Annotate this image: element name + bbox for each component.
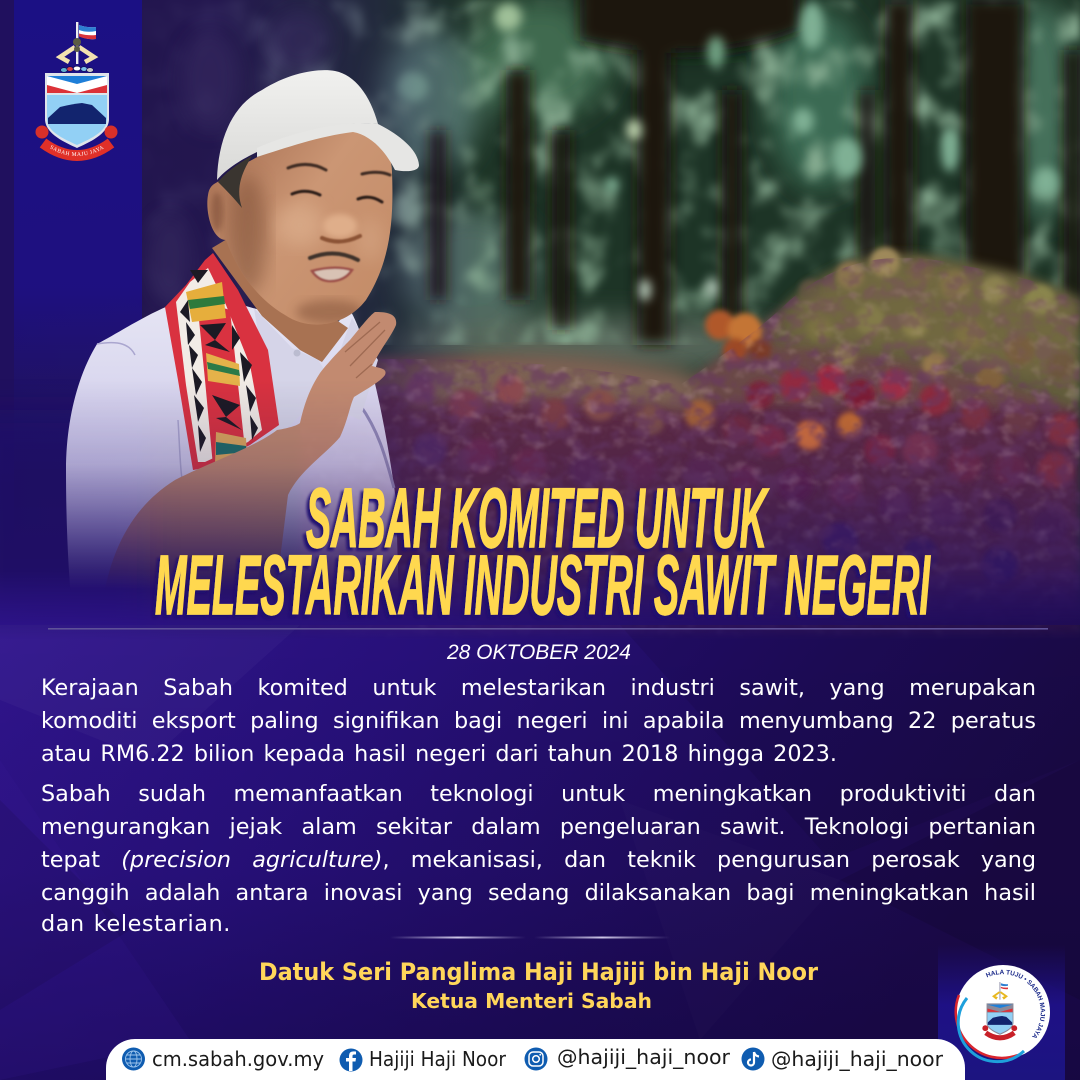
body text: tepat (precision agriculture), mekanisasi, dan teknik pengurusan perosak yang <box>41 847 1036 873</box>
right logo backing panel <box>938 945 1065 1080</box>
palm trunks <box>430 0 1080 345</box>
hands holding pole <box>60 47 94 62</box>
Sabah coat of arms <box>36 22 118 161</box>
light spots <box>398 2 1059 343</box>
red palm fruits <box>405 365 1078 583</box>
fruit pile base <box>300 254 1080 640</box>
facebook text: Hajiji Haji Noor <box>369 1047 507 1071</box>
foliage mottling <box>142 0 1080 345</box>
arm and hand <box>103 312 396 600</box>
background palm plantation photo <box>0 0 1080 640</box>
instagram text: @hajiji_haji_noor <box>557 1045 731 1069</box>
collar <box>254 308 378 412</box>
body text: Kerajaan Sabah komited untuk melestarikan industri sawit, yang merupakan <box>41 675 1036 701</box>
lower purple panel with facets <box>0 560 1080 1080</box>
face shading <box>211 175 384 324</box>
portrait of chief minister <box>66 70 419 582</box>
purple overlays on photo <box>0 0 1080 640</box>
body text: canggih adalah antara inovasi yang sedang dilaksanakan bagi meningkatkan hasil <box>41 880 1036 906</box>
website text: cm.sabah.gov.my <box>152 1047 324 1071</box>
signatory name: Datuk Seri Panglima Haji Hajiji bin Haji Noor <box>259 958 818 986</box>
shirt folds <box>97 343 394 500</box>
shirt <box>66 306 398 582</box>
left blue band <box>0 0 150 650</box>
date: 28 OKTOBER 2024 <box>446 641 631 664</box>
Hala Tuju badge <box>954 965 1050 1064</box>
finger creases <box>345 322 385 378</box>
fruit bunches tan <box>705 247 1074 392</box>
neck <box>212 236 348 362</box>
face features <box>288 164 390 281</box>
signatory position: Ketua Menteri Sabah <box>411 989 652 1013</box>
flag and pole <box>76 22 78 64</box>
title <box>155 471 931 632</box>
patterned scarf <box>165 253 279 470</box>
shield <box>45 73 109 148</box>
paragraph two <box>41 781 1036 937</box>
beads <box>61 66 93 72</box>
paragraph one <box>41 675 1036 767</box>
hair <box>218 156 252 208</box>
head <box>207 128 392 325</box>
icon: facebook <box>340 1048 362 1072</box>
body text: atau RM6.22 bilion kepada hasil negeri dari tahun 2018 hingga 2023. <box>41 741 837 767</box>
contact bar <box>106 1039 965 1080</box>
white cap <box>217 70 419 180</box>
Sabah coat of arms: SABAH MAJU JAYA <box>50 145 104 156</box>
olive tint on rear bunches <box>785 262 1080 390</box>
tiktok text: @hajiji_haji_noor <box>771 1047 944 1071</box>
icon: instagram <box>524 1048 548 1070</box>
badge wording: HALA TUJU • SABAH MAJU JAYA <box>986 970 1046 1038</box>
icon: tiktok <box>742 1048 764 1070</box>
motto ribbon <box>43 143 111 156</box>
icon: website globe <box>122 1048 145 1070</box>
small coat of arms <box>982 982 1017 1038</box>
body text: mengurangkan jejak alam sekitar dalam pengeluaran sawit. Teknologi pertanian <box>41 814 1036 840</box>
body text: dan kelestarian. <box>41 911 231 937</box>
title divider <box>48 628 1048 630</box>
body text: Sabah sudah memanfaatkan teknologi untuk meningkatkan produktiviti dan <box>41 781 1036 807</box>
forest foliage <box>380 0 1080 373</box>
small divider <box>390 936 670 938</box>
body text: komoditi eksport paling signifikan bagi negeri ini apabila menyumbang 22 peratus <box>41 708 1036 734</box>
tan ridge of fruit <box>410 354 700 410</box>
fruit pile texture <box>300 258 1080 640</box>
